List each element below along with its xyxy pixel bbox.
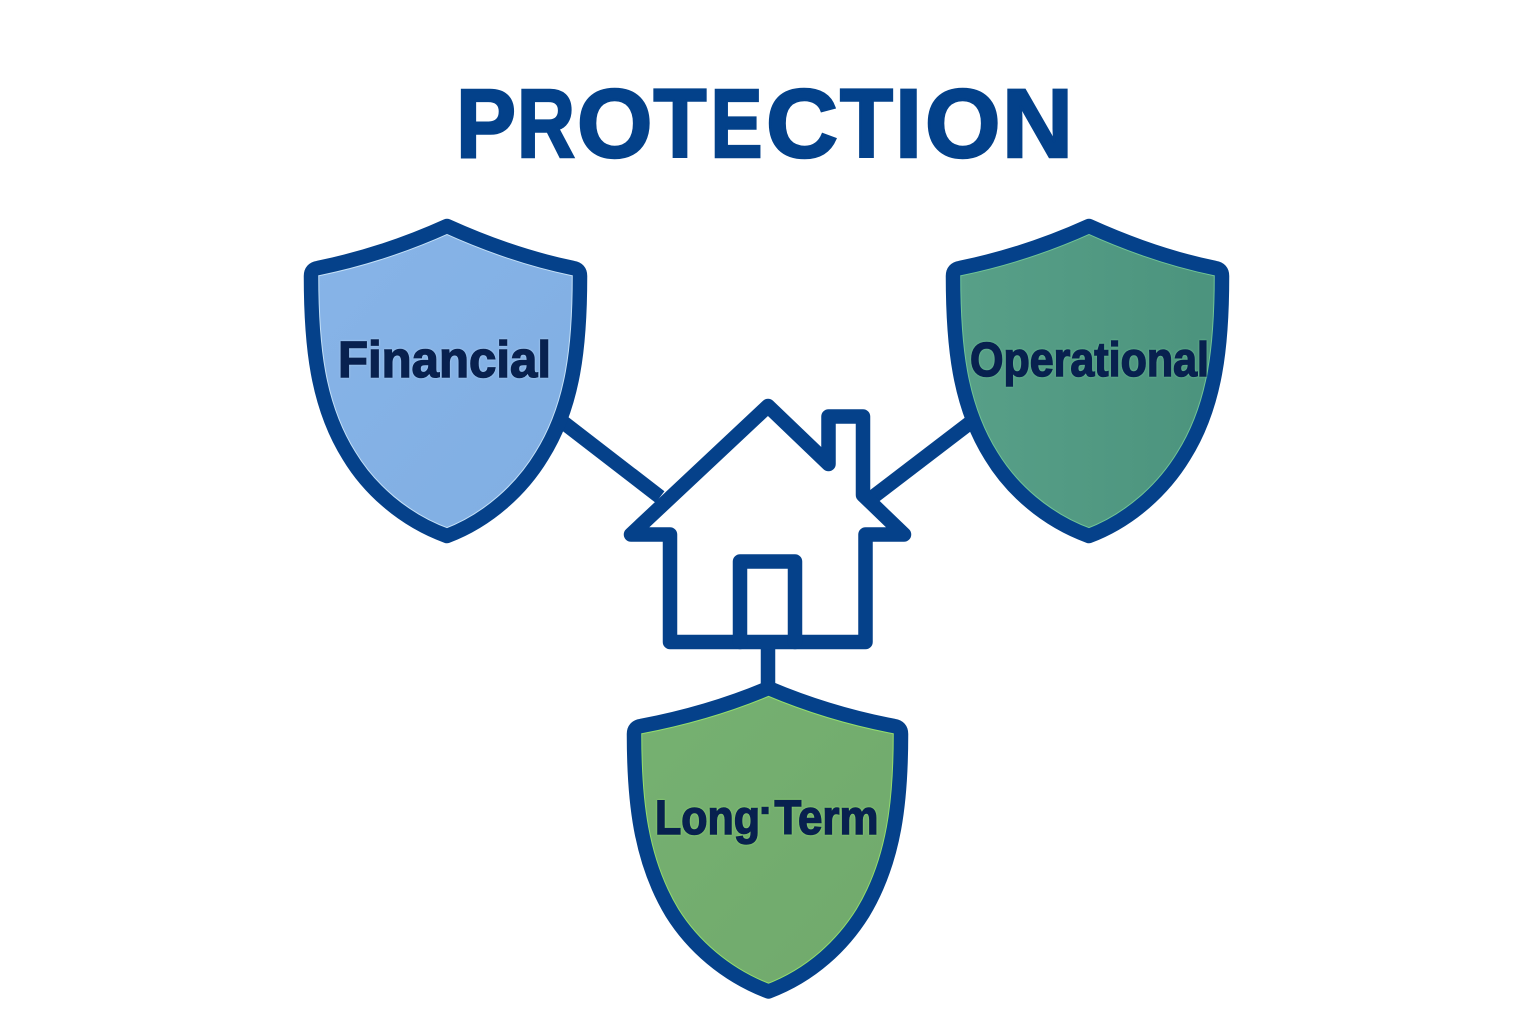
title: T	[840, 69, 893, 178]
shield: Long-Term	[634, 688, 901, 992]
title: P	[456, 69, 516, 178]
shield: Financial	[311, 226, 580, 536]
icon: house	[631, 406, 904, 642]
title: E	[710, 69, 762, 178]
label: Financial: Financial	[338, 331, 551, 388]
label: Operational: Operational	[970, 334, 1209, 387]
label: Long-Term: Term	[774, 792, 878, 845]
title: O	[925, 69, 1000, 178]
title: C	[766, 69, 838, 178]
title: T	[654, 69, 706, 178]
title: O	[577, 69, 652, 178]
title: R	[517, 69, 575, 178]
connector: house to Long-Term shield	[761, 642, 775, 692]
title: I	[895, 69, 922, 178]
connector: Financial shield to house	[555, 416, 660, 497]
shield: Operational	[953, 226, 1222, 536]
label: Long-Term: ·	[760, 789, 773, 833]
title: N	[1002, 69, 1073, 178]
label: Long-Term: Long	[655, 792, 760, 845]
connector: Operational shield to house	[869, 419, 975, 500]
